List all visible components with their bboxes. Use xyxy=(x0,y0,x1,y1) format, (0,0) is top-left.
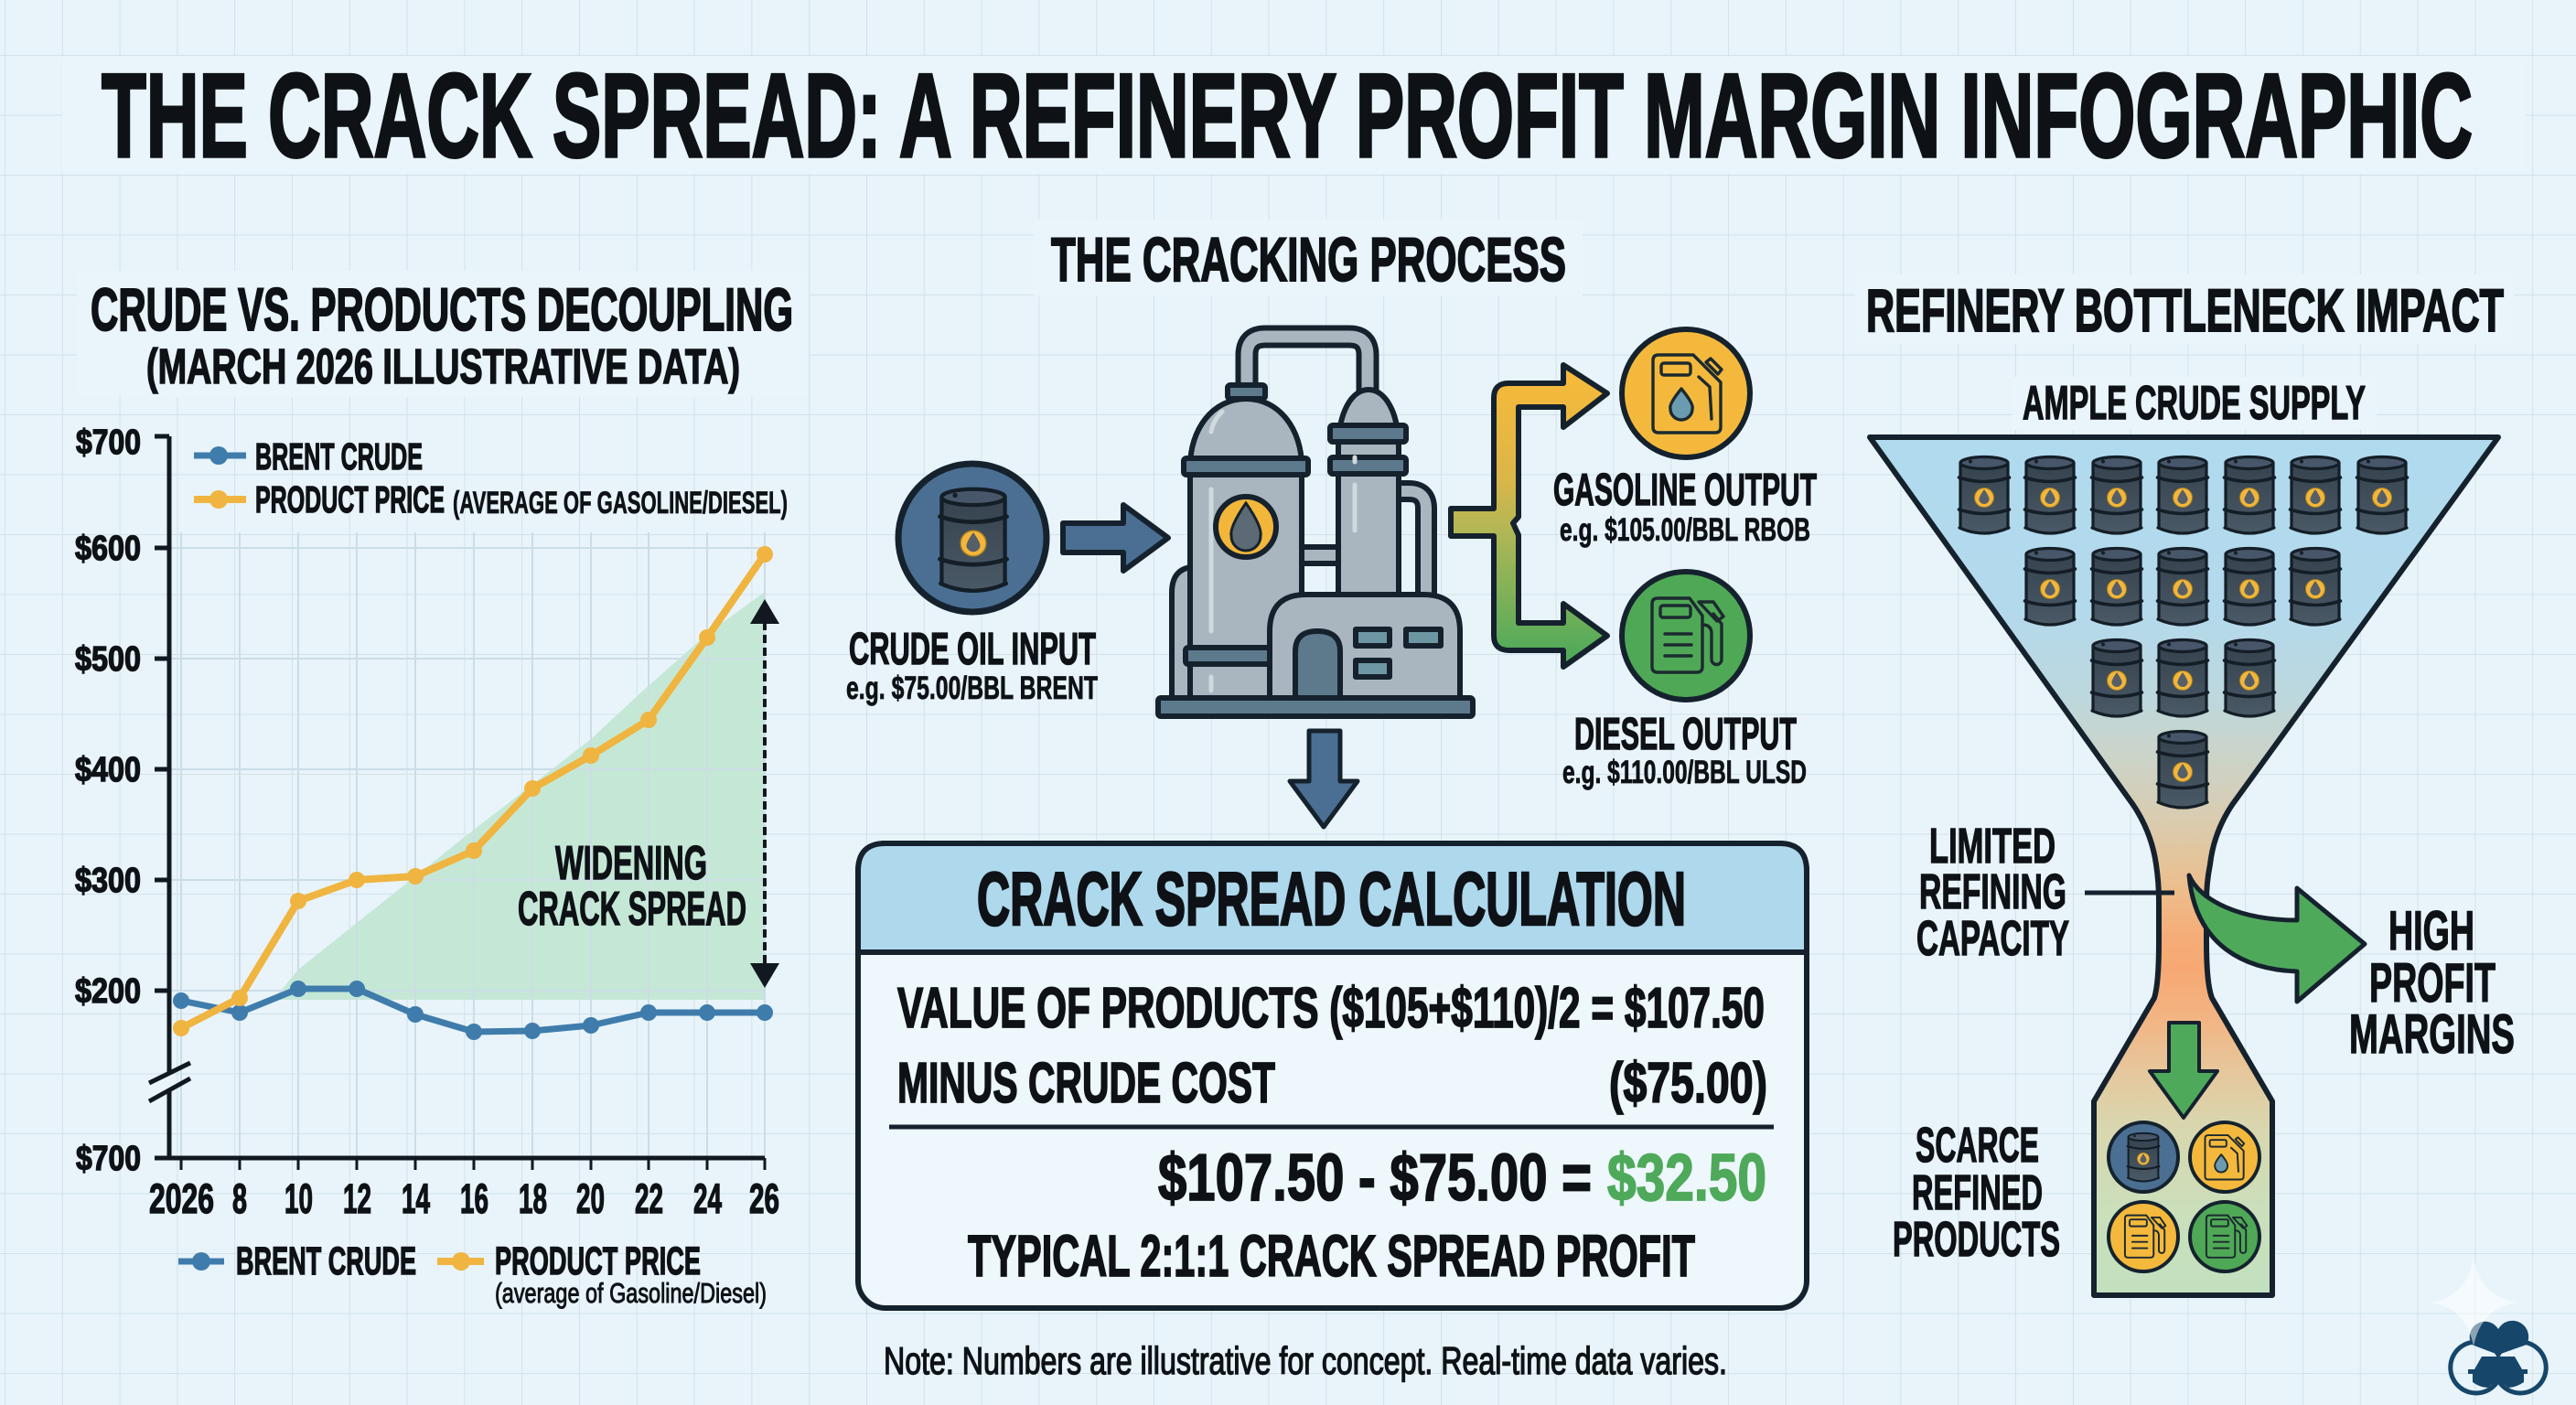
icon: product circles xyxy=(2109,1122,2259,1271)
box header xyxy=(858,843,1807,952)
text: minus crude cost xyxy=(897,1052,1767,1115)
chart: x axis labels: 26 xyxy=(749,1175,779,1222)
label: limited refining capacity xyxy=(1916,819,2174,966)
label: gasoline output: GASOLINE OUTPUT xyxy=(1553,466,1817,515)
chart: y axis labels: $700 xyxy=(76,424,141,462)
text: minus crude cost: MINUS CRUDE COST xyxy=(897,1052,1275,1115)
chart: x axis labels: 2026 xyxy=(149,1175,214,1222)
heading: cracking process: THE CRACKING PROCESS xyxy=(1051,225,1566,295)
chart: y axis labels: $700 xyxy=(76,1140,141,1178)
label: diesel output: DIESEL OUTPUT xyxy=(1574,710,1797,759)
chart: brent crude line xyxy=(173,981,773,1040)
panel: crude vs products chart xyxy=(75,275,793,1309)
chart: x axis labels: 14 xyxy=(402,1175,430,1222)
chart: y axis labels: $600 xyxy=(75,530,141,568)
label: diesel output: e.g. $110.00/BBL ULSD xyxy=(1562,755,1807,790)
subheading: illustrative data: (MARCH 2026 ILLUSTRATIVE DATA) xyxy=(146,339,740,394)
chart: x axis labels: 22 xyxy=(635,1175,663,1222)
legend: bottom: BRENT CRUDE xyxy=(236,1239,416,1283)
chart: x axis labels xyxy=(149,1175,779,1222)
heading: crude vs products: CRUDE VS. PRODUCTS DECOUPLING xyxy=(91,275,793,343)
chart: product price line xyxy=(173,546,773,1036)
chart: y axis labels: $300 xyxy=(75,862,141,900)
chart: y axis labels: $400 xyxy=(75,751,141,789)
arrow: to high margins xyxy=(2189,875,2365,1002)
chart: x axis labels: 8 xyxy=(232,1175,247,1222)
label: high profit margins: HIGH xyxy=(2388,900,2474,961)
panel: cracking process xyxy=(846,225,1817,827)
chart: x axis labels: 20 xyxy=(576,1175,605,1222)
arrow: spread range xyxy=(750,599,779,988)
label: widening crack spread: CRACK SPREAD xyxy=(518,883,746,936)
icon: gasoline circle xyxy=(1622,329,1750,457)
text: value of products: VALUE OF PRODUCTS ($105+$110)/2 = $107.50 xyxy=(897,977,1765,1040)
chart: y axis labels: $500 xyxy=(75,640,141,679)
chart: x axis labels: 16 xyxy=(460,1175,488,1222)
icon: sparkle watermark xyxy=(2431,1258,2517,1346)
note: Note: Numbers are illustrative for concept. Real-time data varies. xyxy=(884,1339,1727,1382)
icon: diesel circle xyxy=(1622,572,1750,700)
label: gasoline output: e.g. $105.00/BBL RBOB xyxy=(1560,512,1810,548)
label: gasoline output xyxy=(1553,466,1817,548)
icons: crude barrels xyxy=(1959,457,2408,808)
legend: top: PRODUCT PRICE xyxy=(255,478,445,520)
label: ample crude supply: AMPLE CRUDE SUPPLY xyxy=(2023,377,2366,430)
legend: bottom: (average of Gasoline/Diesel) xyxy=(495,1277,767,1309)
text: spread result: $107.50 - $75.00 = xyxy=(1158,1142,1592,1215)
chart: x axis labels: 10 xyxy=(284,1175,313,1222)
label: limited refining capacity: CAPACITY xyxy=(1916,911,2069,966)
icon: logo xyxy=(2451,1321,2546,1393)
icon: refinery xyxy=(1158,337,1473,716)
label: high profit margins: PROFIT xyxy=(2369,952,2496,1014)
label: limited refining capacity: LIMITED xyxy=(1929,819,2055,874)
label: crude oil input: e.g. $75.00/BBL BRENT xyxy=(846,670,1098,706)
label: crude oil input xyxy=(846,625,1098,706)
text: typical profit: TYPICAL 2:1:1 CRACK SPREAD PROFIT xyxy=(968,1223,1695,1289)
funnel xyxy=(1870,437,2498,1295)
icon: crude oil circle xyxy=(898,464,1046,612)
label: limited refining capacity: REFINING xyxy=(1919,864,2066,919)
legend: top xyxy=(194,435,788,520)
label: scarce refined products: SCARCE xyxy=(1916,1118,2039,1173)
label: scarce refined products: REFINED xyxy=(1912,1165,2043,1220)
chart: y axis labels: $200 xyxy=(75,972,141,1011)
label: scarce refined products: PRODUCTS xyxy=(1893,1212,2060,1267)
text: spread result: $32.50 xyxy=(1607,1142,1766,1215)
label: widening crack spread: WIDENING xyxy=(555,837,707,890)
chart: x axis labels: 18 xyxy=(519,1175,547,1222)
text: minus crude cost: ($75.00) xyxy=(1609,1052,1767,1115)
chart: spread area xyxy=(274,592,765,1000)
heading: calculation: CRACK SPREAD CALCULATION xyxy=(977,856,1686,941)
legend: top: BRENT CRUDE xyxy=(255,435,423,477)
box body xyxy=(858,843,1807,1308)
label: crude oil input: CRUDE OIL INPUT xyxy=(849,625,1096,674)
chart: x axis labels: 12 xyxy=(343,1175,371,1222)
arrow: refinery to calculation xyxy=(1290,731,1358,827)
arrow: to scarce products xyxy=(2150,1023,2217,1118)
chart: y axis labels xyxy=(75,424,141,1178)
legend: bottom: PRODUCT PRICE xyxy=(495,1239,701,1283)
arrow: branching outputs xyxy=(1451,365,1607,667)
label: high profit margins xyxy=(2349,900,2515,1065)
chart: axes xyxy=(149,436,765,1170)
panel: refinery bottleneck xyxy=(1866,276,2515,1295)
arrow: crude into refinery xyxy=(1063,505,1168,571)
panel: crack spread calculation xyxy=(858,843,1807,1308)
chart: x axis labels: 24 xyxy=(693,1175,722,1222)
label: widening crack spread xyxy=(518,837,746,936)
label: scarce refined products xyxy=(1893,1118,2060,1267)
legend: top: (AVERAGE OF GASOLINE/DIESEL) xyxy=(453,486,788,520)
label: diesel output xyxy=(1562,710,1807,790)
legend: bottom xyxy=(178,1239,767,1309)
